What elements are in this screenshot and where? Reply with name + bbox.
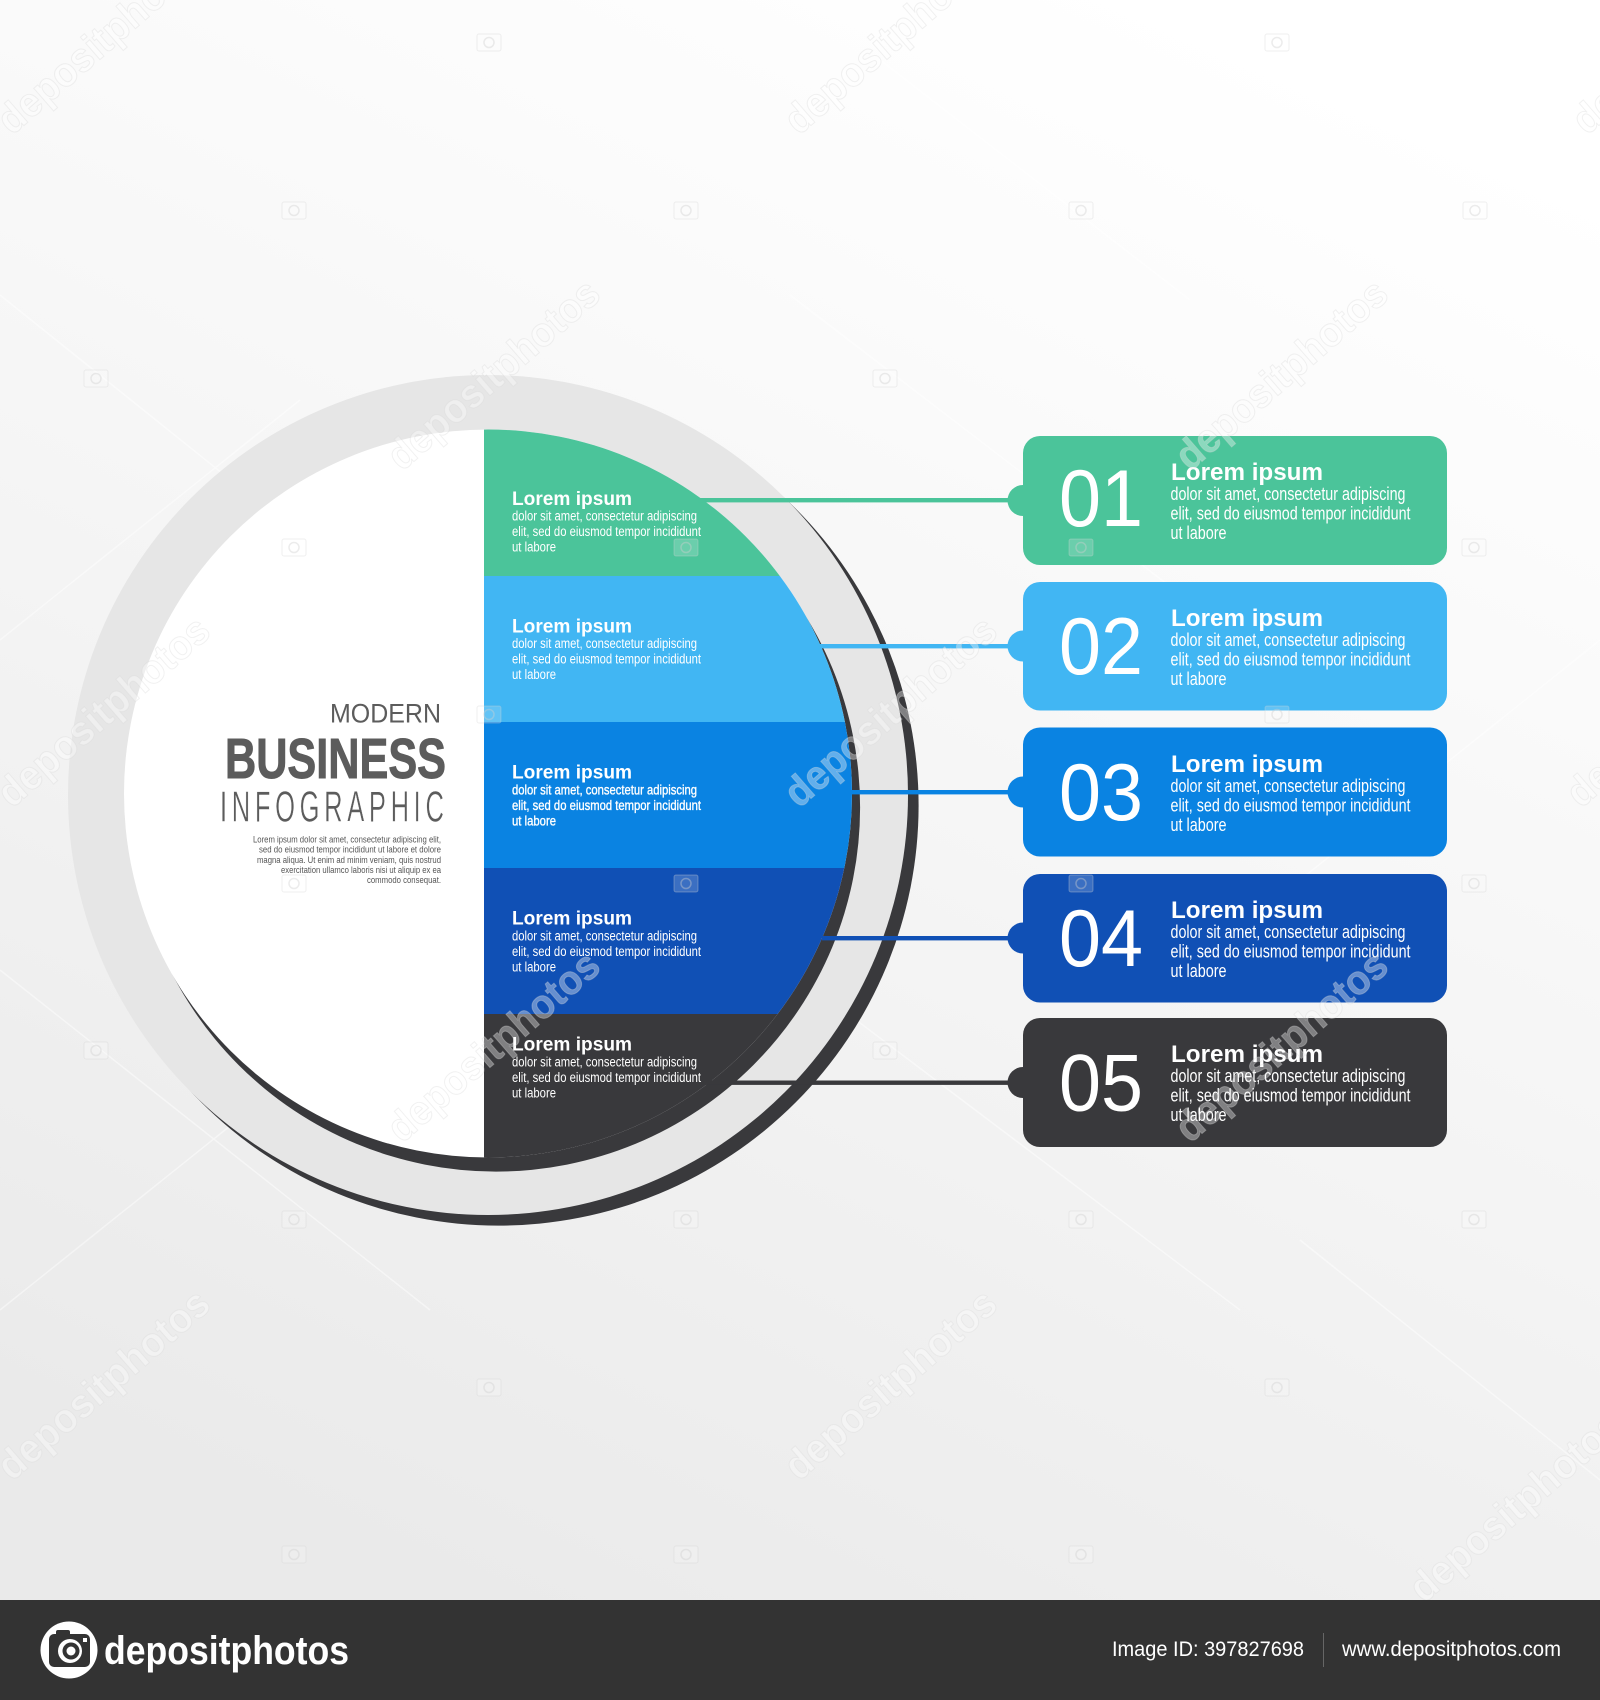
band 1 text: elit, sed do eiusmod tempor incididunt [512,524,701,540]
band 2 text: ut labore [512,667,556,683]
band 1 green [484,430,780,576]
card 4 text: ut labore [1170,961,1226,981]
card 5 text: ut labore [1170,1105,1226,1125]
inner dark crescent circle [132,443,860,1172]
card 3 text [1170,751,1410,835]
depositphotos watermarks: depositphotos [775,1280,1006,1489]
band 2 text [512,616,701,683]
card 2 [1008,582,1447,710]
card 2 number: 02 [1059,602,1143,692]
depositphotos watermarks: depositphotos [378,270,609,479]
card 3 number: 03 [1059,748,1143,838]
card 2 text: dolor sit amet, consectetur adipiscing [1170,630,1406,650]
depositphotos watermarks: depositphotos [1166,270,1397,479]
card 4 text: Lorem ipsum [1171,897,1323,924]
card 5 text [1170,1041,1410,1125]
band 5 text: elit, sed do eiusmod tempor incididunt [512,1070,701,1086]
band 5 text: Lorem ipsum [512,1034,632,1056]
card 4 text [1170,897,1410,981]
band 3 text [512,762,701,830]
band 2 text: elit, sed do eiusmod tempor incididunt [512,652,701,668]
footer bar [0,1600,1600,1700]
colored bands of the disc [484,425,864,1164]
band 5 text: dolor sit amet, consectetur adipiscing [512,1054,697,1070]
band 3 text: Lorem ipsum [512,762,632,784]
band 5 text [512,1034,701,1102]
band 4 text: dolor sit amet, consectetur adipiscing [512,928,697,944]
footer logo text: depositphotos [104,1629,349,1673]
depositphotos watermarks: depositphotos [775,607,1006,816]
band 3 blue [484,722,864,868]
card 2 text: ut labore [1170,669,1226,689]
card 5 text: elit, sed do eiusmod tempor incididunt [1170,1086,1410,1106]
band 5 charcoal [484,1014,778,1158]
connector 4 [822,936,1022,940]
title: INFOGRAPHIC: INFOGRAPHIC [220,781,444,831]
card 5 text: dolor sit amet, consectetur adipiscing [1170,1066,1406,1086]
band 1 text: dolor sit amet, consectetur adipiscing [512,508,697,524]
band 4 text: ut labore [512,960,556,976]
card 1 [1008,436,1447,565]
footer image id: Image ID: 397827698 [1112,1638,1304,1661]
title: BUSINESS: BUSINESS [225,727,446,791]
card 5 number: 05 [1059,1038,1143,1128]
connector 3 [850,790,1020,794]
band 1 text: ut labore [512,540,556,556]
band 2 text: dolor sit amet, consectetur adipiscing [512,636,697,652]
band 3 text: dolor sit amet, consectetur adipiscing [512,782,697,798]
card 5 [1008,1018,1447,1147]
title paragraph: exercitation ullamco laboris nisi ut aliquip ex ea [281,865,442,876]
card 1 text: dolor sit amet, consectetur adipiscing [1170,484,1406,504]
title paragraph: Lorem ipsum dolor sit amet, consectetur adipiscing elit, [253,834,441,846]
card 1 text: elit, sed do eiusmod tempor incididunt [1170,504,1410,524]
card 3 text: dolor sit amet, consectetur adipiscing [1170,776,1406,796]
card 2 text [1170,605,1410,689]
band 3 text: elit, sed do eiusmod tempor incididunt [512,798,701,814]
title paragraph: sed do eiusmod tempor incididunt ut labore et dolore [259,845,441,856]
band 5 text: ut labore [512,1086,556,1102]
card 4 text: elit, sed do eiusmod tempor incididunt [1170,941,1410,961]
card 1 text: Lorem ipsum [1171,459,1323,486]
watermark camera marks [84,34,1487,1563]
band 2 sky blue [484,576,864,722]
white half disc [124,430,852,1158]
title paragraph: commodo consequat. [367,875,441,886]
card 1 number: 01 [1059,454,1143,544]
band 4 text: elit, sed do eiusmod tempor incididunt [512,944,701,960]
band 3 text: ut labore [512,814,556,830]
connector 5 [705,1080,1020,1085]
title block [220,698,446,886]
depositphotos watermarks: depositphotos [1166,942,1397,1151]
band 4 text [512,908,701,976]
title: MODERN: MODERN [330,698,441,728]
depositphotos watermarks: depositphotos [378,942,609,1151]
band 4 text: Lorem ipsum [512,908,632,930]
card 3 text: ut labore [1170,815,1226,835]
title paragraph: magna aliqua. Ut enim ad minim veniam, quis nostrud [257,855,441,866]
card 3 text: Lorem ipsum [1171,751,1323,778]
outer dark crescent circle [78,385,919,1226]
band 1 text: Lorem ipsum [512,489,632,510]
card 2 text: elit, sed do eiusmod tempor incididunt [1170,649,1410,669]
band 2 text: Lorem ipsum [512,616,632,638]
card 3 [1008,728,1447,856]
outer gray ring [68,375,908,1215]
band 1 text [512,489,701,556]
card 1 text: ut labore [1170,523,1226,543]
footer logo icon [40,1622,98,1678]
card 5 text: Lorem ipsum [1171,1041,1323,1068]
card 4 text: dolor sit amet, consectetur adipiscing [1170,922,1406,942]
card 3 text: elit, sed do eiusmod tempor incididunt [1170,795,1410,815]
card 4 number: 04 [1059,894,1143,984]
band 4 navy [484,868,864,1014]
card 2 text: Lorem ipsum [1171,605,1323,632]
connector 2 [820,644,1020,648]
card 1 text [1170,459,1410,543]
footer url: www.depositphotos.com [1341,1638,1561,1661]
title paragraph [253,834,442,886]
connector 1 [698,498,1018,502]
card 4 [1008,874,1447,1002]
footer divider [1323,1633,1324,1667]
